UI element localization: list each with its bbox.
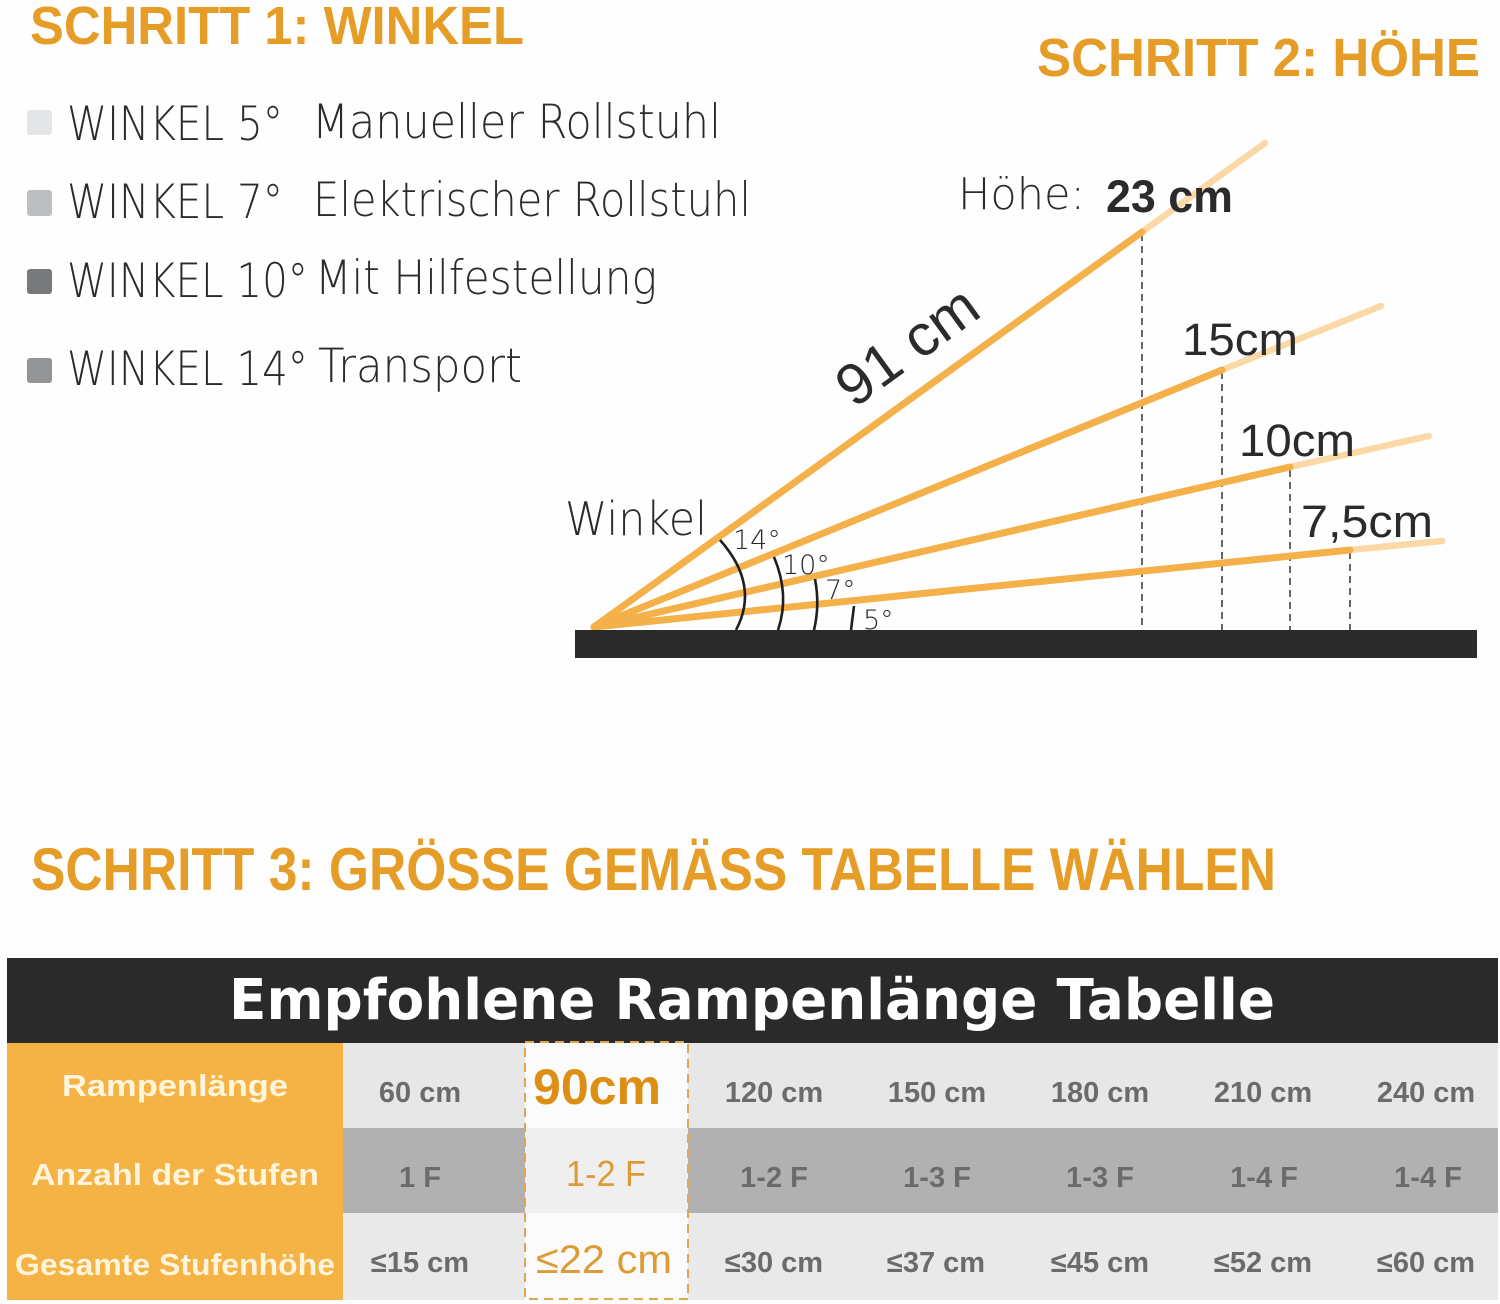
row: Gesamte Stufenhöhe values: ≤15 cm bbox=[371, 1247, 469, 1279]
highlighted column: 90 cm bbox=[525, 1042, 688, 1300]
legend row: 7 degrees: Elektrischer Rollstuhl bbox=[313, 173, 751, 228]
highlighted column: 90 cm: 90cm bbox=[533, 1059, 661, 1115]
row: Gesamte Stufenhöhe values: ≤37 cm bbox=[887, 1247, 985, 1279]
angle labels: 14° bbox=[733, 525, 781, 556]
row: Gesamte Stufenhöhe values: ≤30 cm bbox=[725, 1247, 823, 1279]
ramp extensions bbox=[1142, 143, 1442, 550]
angle labels: 10° bbox=[782, 550, 830, 581]
table title bar: Empfohlene Rampenlänge Tabelle bbox=[229, 968, 1275, 1033]
row: Gesamte Stufenhöhe values bbox=[371, 1247, 1475, 1279]
legend row: 14 degrees bbox=[27, 339, 522, 397]
legend row: 7 degrees: WINKEL 7° bbox=[67, 175, 283, 230]
legend row: 10 degrees: Mit Hilfestellung bbox=[315, 251, 657, 306]
legend row: 7 degrees bbox=[27, 173, 751, 230]
row headers: Gesamte Stufenhöhe bbox=[15, 1247, 335, 1282]
row headers bbox=[7, 1043, 343, 1300]
height value: 10cm: 10cm bbox=[1239, 415, 1355, 466]
row: Gesamte Stufenhöhe values: ≤52 cm bbox=[1214, 1247, 1312, 1279]
label: Winkel: Winkel bbox=[565, 492, 707, 546]
legend row: 10 degrees bbox=[27, 251, 657, 309]
height value: 7,5cm: 7,5cm bbox=[1301, 496, 1433, 547]
table title bar bbox=[7, 958, 1498, 1043]
row: Anzahl der Stufen values: 1-4 F bbox=[1394, 1162, 1462, 1194]
row: Rampenlänge values: 210 cm bbox=[1214, 1077, 1312, 1109]
legend row: 10 degrees: WINKEL 10° bbox=[67, 254, 308, 309]
row: Rampenlänge values: 150 cm bbox=[888, 1077, 986, 1109]
row: Rampenlänge values: 120 cm bbox=[725, 1077, 823, 1109]
row: Gesamte Stufenhöhe values: ≤60 cm bbox=[1377, 1247, 1475, 1279]
highlighted column: 90 cm: 1-2 F bbox=[566, 1153, 646, 1194]
legend row: 5 degrees bbox=[27, 95, 721, 152]
row: Anzahl der Stufen values: 1-3 F bbox=[903, 1162, 971, 1194]
angle labels bbox=[733, 525, 894, 636]
ground bar bbox=[575, 630, 1477, 658]
row: Gesamte Stufenhöhe values: ≤45 cm bbox=[1051, 1247, 1149, 1279]
height value: 15cm: 15cm bbox=[1182, 314, 1298, 365]
row: Rampenlänge values: 240 cm bbox=[1377, 1077, 1475, 1109]
row: Anzahl der Stufen values: 1 F bbox=[399, 1162, 441, 1194]
ramp lines bbox=[594, 232, 1350, 627]
height value: 23 cm: 23 cm bbox=[1106, 171, 1233, 222]
table row backgrounds bbox=[343, 1043, 1498, 1300]
legend row: 14 degrees: Transport bbox=[318, 339, 522, 394]
row: Rampenlänge values: 180 cm bbox=[1051, 1077, 1149, 1109]
row: Anzahl der Stufen values: 1-3 F bbox=[1066, 1162, 1134, 1194]
row: Anzahl der Stufen values: 1-2 F bbox=[740, 1162, 808, 1194]
row headers: Rampenlänge bbox=[62, 1068, 288, 1103]
row: Rampenlänge values: 60 cm bbox=[379, 1077, 461, 1109]
angle labels: 7° bbox=[825, 575, 856, 606]
legend row: 5 degrees: Manueller Rollstuhl bbox=[312, 95, 721, 150]
row: Anzahl der Stufen values: 1-4 F bbox=[1230, 1162, 1298, 1194]
highlighted column: 90 cm: ≤22 cm bbox=[536, 1238, 672, 1282]
row: Anzahl der Stufen values bbox=[399, 1162, 1462, 1194]
row headers: Anzahl der Stufen bbox=[31, 1157, 319, 1192]
label: Höhe: Höhe: bbox=[958, 169, 1085, 220]
label: ramp length: 91 cm bbox=[823, 273, 991, 420]
legend row: 14 degrees: WINKEL 14° bbox=[67, 342, 308, 397]
heading: Schritt 2: SCHRITT 2: HÖHE bbox=[1037, 28, 1480, 88]
legend row: 5 degrees: WINKEL 5° bbox=[67, 97, 283, 152]
row: Rampenlänge values bbox=[379, 1077, 1475, 1109]
height guide lines bbox=[1142, 234, 1350, 630]
heading: Schritt 3: SCHRITT 3: GRÖSSE GEMÄSS TABELLE WÄHLEN bbox=[31, 836, 1276, 903]
table bbox=[7, 958, 1498, 1300]
diagram: ramp angles and heights bbox=[565, 143, 1477, 658]
angle arcs bbox=[720, 540, 854, 630]
legend: angles bbox=[27, 95, 751, 397]
angle labels: 5° bbox=[863, 605, 894, 636]
